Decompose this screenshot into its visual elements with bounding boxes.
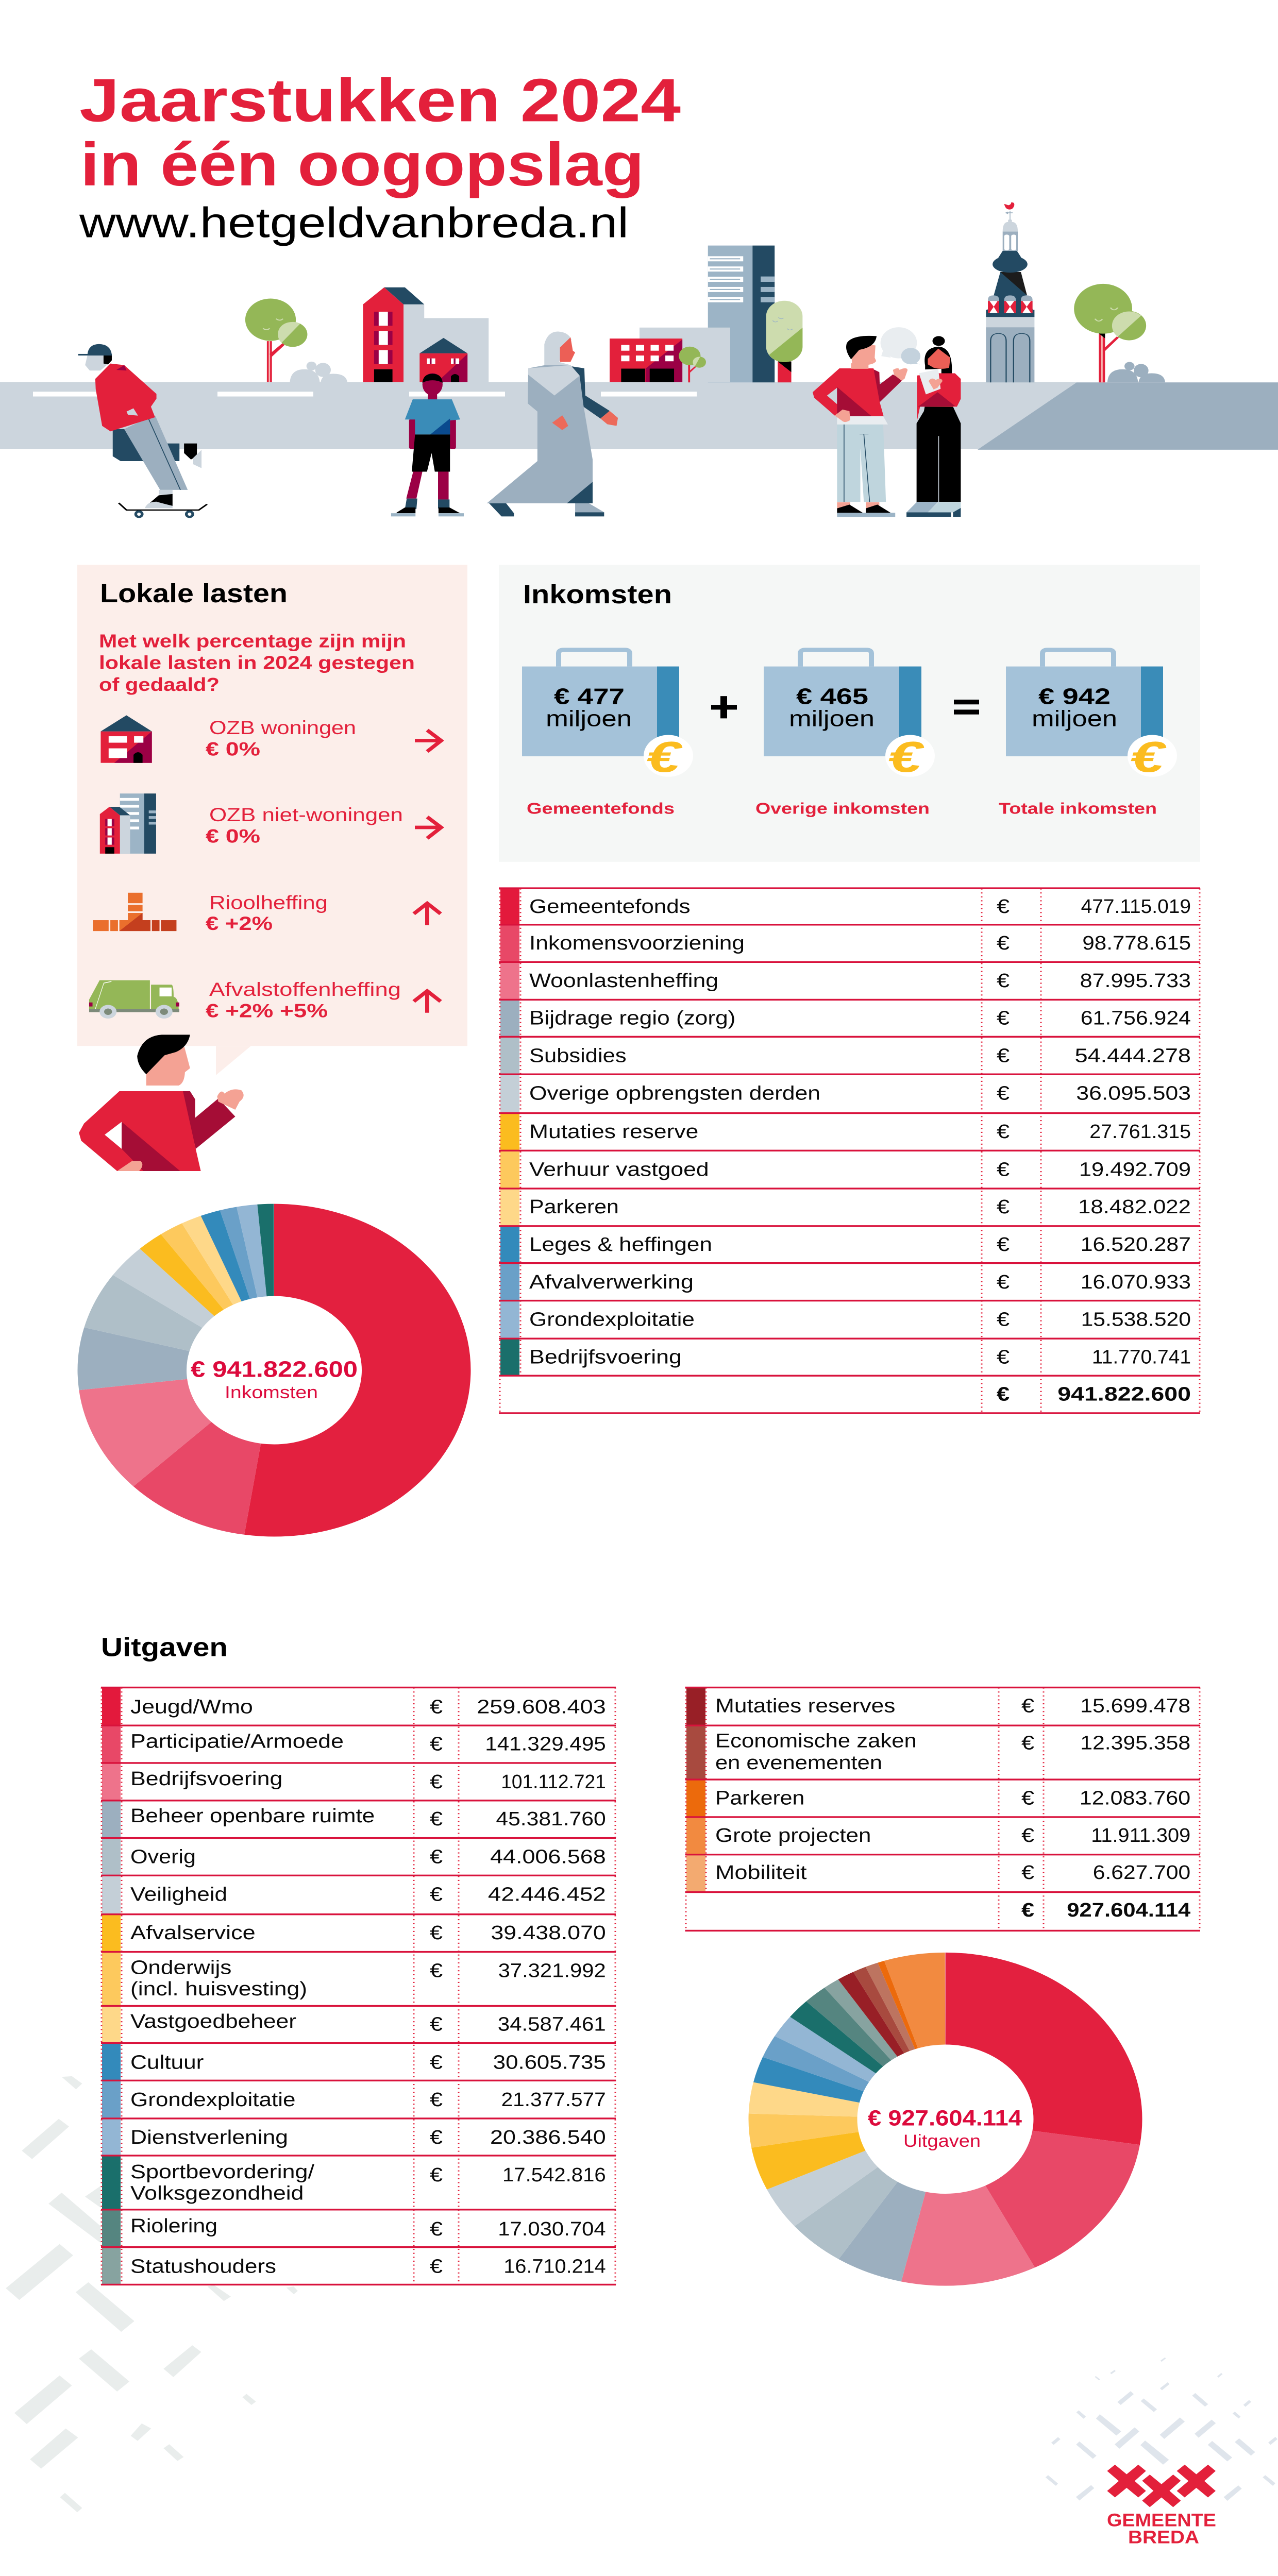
- question text: [99, 631, 415, 695]
- row: Dienstverlening: Dienstverlening: [130, 2126, 288, 2148]
- row: Subsidies: 54.444.278: [1075, 1044, 1191, 1066]
- row: Mobiliteit: €: [1021, 1861, 1034, 1883]
- row: Grote projecten: €: [1021, 1824, 1034, 1846]
- office tower: [708, 246, 775, 382]
- row: Dienstverlening: [130, 2126, 606, 2148]
- bag: Overige inkomsten: € 465: [796, 684, 868, 709]
- row: Afvalservice: Afvalservice: [130, 1921, 256, 1943]
- row: Onderwijs: €: [430, 1959, 443, 1981]
- row: Mutaties reserves: 15.699.478: [1080, 1694, 1190, 1717]
- row: Economische zaken en evenementen: €: [1021, 1732, 1034, 1754]
- row: Subsidies: Subsidies: [529, 1044, 627, 1066]
- logo: Gemeente Breda: [1107, 2465, 1216, 2548]
- row: Dienstverlening: €: [430, 2126, 443, 2148]
- equals sign: [954, 700, 979, 715]
- row: Riolering: €: [430, 2217, 443, 2240]
- row: Onderwijs: Onderwijs: [130, 1956, 231, 1978]
- row: Verhuur vastgoed: [529, 1158, 1191, 1180]
- gray block behind house: [403, 304, 489, 382]
- row: Participatie/Armoede: Participatie/Armoede: [130, 1730, 344, 1752]
- row: Bijdrage regio (zorg): [529, 1007, 1191, 1029]
- row: Economische zaken en evenementen: [715, 1730, 1190, 1773]
- item: OZB woningen: OZB woningen: [209, 717, 356, 738]
- small tree: [679, 347, 706, 382]
- red tower house: [363, 287, 424, 382]
- church tower: [986, 202, 1034, 382]
- row: totaal inkomsten: €: [997, 1383, 1010, 1405]
- row: Mutaties reserves: €: [1021, 1694, 1034, 1717]
- row: Statushouders: €: [430, 2255, 443, 2277]
- woman: [906, 336, 961, 517]
- man: [813, 336, 907, 517]
- row: Cultuur: 30.605.735: [493, 2051, 606, 2073]
- row: Inkomensvoorziening: 98.778.615: [1082, 931, 1191, 954]
- row: Cultuur: Cultuur: [130, 2051, 204, 2073]
- table: uitgaven rechts: [685, 1687, 1200, 1930]
- row: Mobiliteit: [715, 1861, 1190, 1883]
- row: Overig: 44.006.568: [490, 1845, 606, 1868]
- row: Riolering: [130, 2214, 606, 2240]
- bag: Totale inkomsten: € 942: [1038, 684, 1111, 709]
- row: Parkeren: €: [997, 1196, 1010, 1217]
- row: Grote projecten: [715, 1824, 1190, 1846]
- row: Jeugd/Wmo: Jeugd/Wmo: [130, 1696, 253, 1718]
- row: Afvalservice: [130, 1921, 606, 1943]
- row: Bijdrage regio (zorg): Bijdrage regio (zorg): [529, 1007, 735, 1029]
- row: Overig: €: [430, 1845, 443, 1868]
- plus sign: [711, 696, 737, 718]
- item: Afvalstoffenheffing: Afvalstoffenheffing: [209, 978, 401, 1000]
- speech bubbles: [881, 327, 920, 364]
- pedestrians and skater: [78, 331, 618, 518]
- donut centre total: € 927.604.114: [868, 2106, 1022, 2130]
- row: Subsidies: [529, 1044, 1191, 1066]
- arrow: OZB woningen: [415, 730, 441, 752]
- row: totaal uitgaven: 927.604.114: [1067, 1899, 1190, 1921]
- row: Afvalverwerking: [529, 1270, 1191, 1293]
- row: Participatie/Armoede: €: [430, 1733, 443, 1755]
- row: Onderwijs: (incl. huisvesting): [130, 1977, 307, 1999]
- row: Afvalservice: 39.438.070: [491, 1921, 606, 1943]
- logo wordmark: [1107, 2510, 1216, 2548]
- bag: Overige inkomsten: €: [888, 733, 924, 782]
- row: Mutaties reserves: Mutaties reserves: [715, 1694, 895, 1717]
- row: Statushouders: 16.710.214: [503, 2255, 606, 2277]
- boy: [391, 373, 464, 516]
- row: Mobiliteit: Mobiliteit: [715, 1861, 807, 1883]
- website url: www.hetgeldvanbreda.nl: [79, 199, 629, 247]
- title: [79, 66, 681, 198]
- row: Sportbevordering/Volksgezondheid: Volksgezondheid: [130, 2182, 304, 2204]
- row: Subsidies: €: [997, 1044, 1010, 1066]
- row: Vastgoedbeheer: Vastgoedbeheer: [130, 2010, 296, 2032]
- row: Woonlastenheffing: €: [997, 969, 1010, 991]
- row: Parkeren: €: [1021, 1787, 1034, 1809]
- item: OZB niet-woningen: OZB niet-woningen: [209, 804, 403, 825]
- table: inkomsten: [499, 888, 1200, 1413]
- row: Parkeren: 12.083.760: [1080, 1787, 1190, 1809]
- row: Sportbevordering/Volksgezondheid: [130, 2160, 606, 2204]
- row: Parkeren: 18.482.022: [1078, 1196, 1191, 1217]
- red office: [610, 338, 682, 382]
- item: Afvalstoffenheffing: [206, 978, 401, 1021]
- row: Overige opbrengsten derden: Overige opbrengsten derden: [529, 1082, 820, 1104]
- row: Vastgoedbeheer: 34.587.461: [498, 2013, 606, 2035]
- row: Gemeentefonds: 477.115.019: [1081, 895, 1191, 917]
- row: Leges & heffingen: [529, 1233, 1191, 1255]
- row: Parkeren: Parkeren: [529, 1196, 619, 1217]
- bag: Totale inkomsten: [1006, 650, 1177, 782]
- icon: house: [100, 715, 152, 763]
- row: Gemeentefonds: [529, 895, 1191, 917]
- row: Parkeren: [529, 1196, 1191, 1217]
- row: Bedrijfsvoering: €: [997, 1346, 1010, 1368]
- question text: of gedaald?: [99, 674, 220, 695]
- row: Leges & heffingen: Leges & heffingen: [529, 1233, 712, 1255]
- heading: Uitgaven: Uitgaven: [101, 1633, 228, 1662]
- right bushes: [1107, 362, 1165, 382]
- row: Veiligheid: Veiligheid: [130, 1883, 227, 1905]
- couple talking: [813, 327, 961, 517]
- row: Mutaties reserve: €: [997, 1120, 1010, 1142]
- row: Grondexploitatie: €: [430, 2088, 443, 2110]
- row: Woonlastenheffing: 87.995.733: [1080, 969, 1191, 991]
- buildings and tree: left part: [245, 287, 682, 382]
- row: Grondexploitatie: 15.538.520: [1081, 1308, 1191, 1330]
- row: Statushouders: [130, 2255, 606, 2277]
- woman with hijab: [487, 331, 618, 516]
- bag: Gemeentefonds: €: [646, 733, 682, 782]
- logo crosses: [1107, 2465, 1216, 2507]
- question text: lokale lasten in 2024 gestegen: [99, 653, 415, 673]
- row: Sportbevordering/Volksgezondheid: €: [430, 2163, 443, 2185]
- row: Bedrijfsvoering: 101.112.721: [501, 1770, 606, 1792]
- row: Woonlastenheffing: Woonlastenheffing: [529, 969, 718, 991]
- bag: Overige inkomsten: miljoen: [789, 706, 875, 732]
- icon: office buildings: [100, 793, 156, 854]
- item: OZB niet-woningen: [206, 804, 403, 847]
- title: in één oogopslag: [80, 131, 644, 198]
- row: Grondexploitatie: [130, 2088, 606, 2110]
- table rules: [101, 1687, 616, 2284]
- row: Afvalverwerking: €: [997, 1270, 1010, 1293]
- row: Bijdrage regio (zorg): 61.756.924: [1081, 1007, 1191, 1029]
- row: Economische zaken en evenementen: 12.395.358: [1080, 1732, 1190, 1754]
- bag: Totale inkomsten: €: [1130, 733, 1166, 782]
- row: Veiligheid: 42.446.452: [488, 1883, 606, 1905]
- row: Gemeentefonds: €: [997, 895, 1010, 917]
- item: Rioolheffing: [206, 891, 328, 934]
- row: Grondexploitatie: €: [997, 1308, 1010, 1330]
- bag: Overige inkomsten: [764, 650, 935, 782]
- row: Verhuur vastgoed: Verhuur vastgoed: [529, 1158, 709, 1180]
- background pattern: behind logo: [1046, 2358, 1277, 2501]
- row: Gemeentefonds: Gemeentefonds: [529, 895, 691, 917]
- row: Bedrijfsvoering: Bedrijfsvoering: [130, 1767, 282, 1789]
- table rules: [685, 1687, 1200, 1930]
- row: Mutaties reserve: [529, 1120, 1191, 1142]
- row: Participatie/Armoede: 141.329.495: [485, 1733, 606, 1755]
- row: Veiligheid: [130, 1883, 606, 1905]
- label: Gemeentefonds: Gemeentefonds: [527, 800, 675, 818]
- tall tree: [766, 301, 802, 382]
- row: Afvalverwerking: 16.070.933: [1081, 1270, 1191, 1293]
- row: Grote projecten: 11.911.309: [1091, 1824, 1190, 1846]
- arrow: Rioolheffing: [414, 903, 441, 925]
- row: Bedrijfsvoering: Bedrijfsvoering: [529, 1346, 682, 1368]
- row: totaal uitgaven: €: [1021, 1899, 1034, 1921]
- row: Beheer openbare ruimte: [130, 1804, 606, 1829]
- row: Overige opbrengsten derden: €: [997, 1082, 1010, 1104]
- row: Jeugd/Wmo: €: [430, 1696, 443, 1718]
- donut centre total: € 941.822.600: [191, 1357, 358, 1382]
- row: Inkomensvoorziening: [529, 931, 1191, 954]
- row: Woonlastenheffing: [529, 969, 1191, 991]
- right tree: [1074, 284, 1146, 382]
- heading: Inkomsten: Inkomsten: [523, 580, 672, 609]
- low gray block: [640, 328, 730, 382]
- row: Jeugd/Wmo: [130, 1696, 606, 1718]
- row: Overige opbrengsten derden: [529, 1082, 1191, 1104]
- item: Rioolheffing: € +2%: [206, 912, 273, 934]
- skater: [78, 344, 207, 518]
- row: Parkeren: Parkeren: [715, 1787, 804, 1809]
- donut chart: inkomsten: [132, 1250, 416, 1490]
- row: Bedrijfsvoering: [130, 1767, 606, 1792]
- row: Jeugd/Wmo: 259.608.403: [477, 1696, 606, 1718]
- row: Inkomensvoorziening: €: [997, 931, 1010, 954]
- row: Onderwijs: 37.321.992: [498, 1959, 606, 1981]
- donut chart: uitgaven: [803, 1998, 1088, 2240]
- small house: [419, 338, 467, 382]
- right part buildings: [679, 202, 1165, 517]
- row: Beheer openbare ruimte: Beheer openbare ruimte: [130, 1804, 375, 1826]
- row: Mutaties reserve: 27.761.315: [1089, 1120, 1191, 1142]
- row: Vastgoedbeheer: [130, 2010, 606, 2035]
- donut centre label: Uitgaven: [903, 2131, 981, 2150]
- donut centre label: Inkomsten: [225, 1382, 318, 1402]
- item: OZB woningen: [206, 717, 356, 760]
- row: Beheer openbare ruimte: €: [430, 1807, 443, 1829]
- background pattern: bottom left: [6, 2076, 298, 2512]
- row: Mutaties reserves: [715, 1694, 1190, 1717]
- bushes: [290, 362, 347, 382]
- row: Bedrijfsvoering: €: [430, 1770, 443, 1792]
- heading: Lokale lasten: Lokale lasten: [100, 579, 288, 608]
- row: Overige opbrengsten derden: 36.095.503: [1076, 1082, 1191, 1104]
- icon: sewer pipe: [93, 893, 176, 931]
- item: OZB niet-woningen: € 0%: [206, 825, 260, 847]
- colour keys: [102, 1688, 121, 2284]
- road: [0, 382, 1278, 450]
- row: Overig: Overig: [130, 1845, 196, 1868]
- arrow: OZB niet-woningen: [415, 817, 441, 838]
- logo wordmark: BREDA: [1128, 2527, 1199, 2548]
- row: Participatie/Armoede: [130, 1730, 606, 1755]
- row: Afvalverwerking: Afvalverwerking: [529, 1270, 694, 1293]
- row: Economische zaken en evenementen: en evenementen: [715, 1751, 882, 1773]
- row: Mutaties reserve: Mutaties reserve: [529, 1120, 698, 1142]
- row: Statushouders: Statushouders: [130, 2255, 276, 2277]
- row: Riolering: 17.030.704: [498, 2217, 606, 2240]
- row: Riolering: Riolering: [130, 2214, 217, 2236]
- row: Sportbevordering/Volksgezondheid: 17.542.816: [502, 2163, 606, 2185]
- row: Veiligheid: €: [430, 1883, 443, 1905]
- row: Bedrijfsvoering: 11.770.741: [1092, 1346, 1191, 1368]
- item: Rioolheffing: Rioolheffing: [209, 891, 328, 913]
- table: uitgaven links: [101, 1687, 616, 2284]
- icon: garbage truck: [89, 980, 179, 1019]
- panel: Lokale lasten: [77, 565, 467, 1075]
- row: Dienstverlening: 20.386.540: [490, 2126, 606, 2148]
- row: totaal inkomsten: [997, 1383, 1191, 1405]
- logo wordmark: GEMEENTE: [1107, 2510, 1216, 2531]
- row: Parkeren: [715, 1787, 1190, 1809]
- colour keys: [686, 1688, 705, 1892]
- row: Cultuur: €: [430, 2051, 443, 2073]
- table rules: [499, 888, 1200, 1413]
- row: Onderwijs: [130, 1956, 606, 1999]
- row: Grondexploitatie: 21.377.577: [501, 2088, 606, 2110]
- row: Cultuur: [130, 2051, 606, 2073]
- row: Bijdrage regio (zorg): €: [997, 1007, 1010, 1029]
- row: Inkomensvoorziening: Inkomensvoorziening: [529, 931, 745, 954]
- question text: Met welk percentage zijn mijn: [99, 631, 406, 652]
- arrow: Afvalstoffenheffing: [414, 991, 441, 1013]
- row: Leges & heffingen: €: [997, 1233, 1010, 1255]
- row: Bedrijfsvoering: [529, 1346, 1191, 1368]
- row: Verhuur vastgoed: 19.492.709: [1079, 1158, 1191, 1180]
- illustration: street scene: [0, 202, 1278, 518]
- row: Beheer openbare ruimte: 45.381.760: [496, 1807, 606, 1829]
- character: man pointing at panel: [79, 1035, 244, 1171]
- row: Verhuur vastgoed: €: [997, 1158, 1010, 1180]
- row: Grondexploitatie: Grondexploitatie: [529, 1308, 695, 1330]
- row: Vastgoedbeheer: €: [430, 2013, 443, 2035]
- bag: Gemeentefonds: € 477: [554, 684, 625, 709]
- row: Grote projecten: Grote projecten: [715, 1824, 871, 1846]
- bag: Gemeentefonds: [522, 650, 693, 782]
- item: OZB woningen: € 0%: [206, 738, 260, 760]
- row: Grondexploitatie: [529, 1308, 1191, 1330]
- panel: Inkomsten: [499, 565, 1200, 862]
- bag: Gemeentefonds: miljoen: [546, 706, 632, 732]
- item: Afvalstoffenheffing: € +2% +5%: [206, 999, 328, 1021]
- bag: Totale inkomsten: miljoen: [1032, 706, 1117, 732]
- tree: [245, 299, 307, 382]
- label: Overige inkomsten: Overige inkomsten: [755, 800, 930, 818]
- row: Grondexploitatie: Grondexploitatie: [130, 2088, 295, 2110]
- row: Overig: [130, 1845, 606, 1868]
- row: Afvalservice: €: [430, 1921, 443, 1943]
- row: Leges & heffingen: 16.520.287: [1081, 1233, 1191, 1255]
- colour keys: [500, 889, 519, 1376]
- title: Jaarstukken 2024: [79, 66, 681, 134]
- label: Totale inkomsten: Totale inkomsten: [999, 800, 1157, 818]
- row: Sportbevordering/Volksgezondheid: Sportbevordering/: [130, 2160, 314, 2182]
- row: Mobiliteit: 6.627.700: [1093, 1861, 1190, 1883]
- row: Economische zaken en evenementen: Economische zaken: [715, 1730, 917, 1752]
- row: totaal inkomsten: 941.822.600: [1057, 1383, 1191, 1405]
